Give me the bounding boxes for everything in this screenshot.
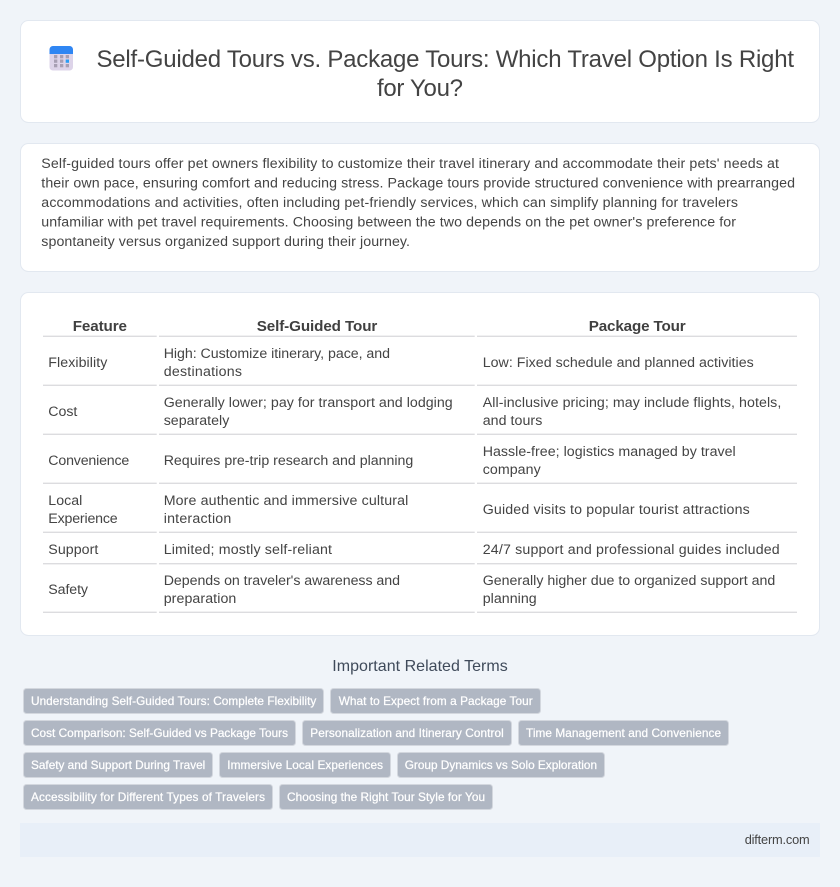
row: support: Support (48, 542, 98, 558)
tag: personalization (302, 720, 512, 746)
row: safety: Generally higher due to organized support and (483, 573, 775, 589)
tag: time management (518, 720, 728, 746)
row: flexibility: destinations (164, 364, 242, 380)
tag: understanding self-guided tours (24, 688, 324, 714)
row: convenience: company (483, 462, 542, 478)
row: cost: All-inclusive pricing; may include flights, hotels, (483, 395, 781, 411)
row: safety: preparation (164, 591, 236, 607)
table header (73, 318, 686, 335)
row: convenience: Requires pre-trip research and planning (164, 453, 413, 469)
tag: cost comparison: Cost Comparison: Self-Guided vs Package Tours (31, 726, 288, 740)
panel: related term tags (24, 688, 728, 810)
tag: accessibility: Accessibility for Different Types of Travelers (31, 790, 265, 804)
text block: introduction paragraph: spontaneity versus organized support during their journey. (41, 234, 410, 250)
row: flexibility: High: Customize itinerary, pace, and (164, 346, 390, 362)
row: local experience: Experience (48, 511, 118, 527)
panel: title card (20, 20, 820, 122)
row: local experience (48, 493, 750, 527)
tag: accessibility (24, 784, 272, 810)
table header: Self-Guided Tour (257, 318, 377, 335)
row: cost: and tours (483, 413, 542, 429)
row: safety: Depends on traveler's awareness and (164, 573, 400, 589)
tag: what to expect (330, 688, 540, 714)
panel: comparison table (20, 292, 820, 636)
row: support: Limited; mostly self-reliant (164, 542, 332, 558)
tag: time management: Time Management and Convenience (526, 726, 721, 740)
tag: personalization: Personalization and Itinerary Control (310, 726, 504, 740)
row: flexibility: Low: Fixed schedule and planned activities (483, 355, 754, 371)
row: cost: Cost (48, 404, 77, 420)
title: for You? (377, 75, 463, 102)
tag: group dynamics (398, 752, 604, 778)
row: convenience: Hassle-free; logistics managed by travel (483, 444, 736, 460)
row: local experience: Guided visits to popular tourist attractions (483, 502, 750, 518)
table rules (43, 336, 797, 613)
footer (20, 823, 820, 857)
text block: introduction paragraph: unfamiliar with pet travel requirements. Choosing between the two depends on the pet owner's preference for (41, 214, 736, 230)
row: flexibility (48, 346, 754, 380)
table header: Package Tour (589, 318, 686, 335)
icon: calendar (50, 46, 73, 70)
row: safety (48, 573, 775, 607)
footer: difterm.com (745, 832, 810, 847)
tag: safety and support: Safety and Support During Travel (31, 758, 205, 772)
row: support (48, 542, 780, 558)
title (96, 46, 794, 102)
tag: cost comparison (24, 720, 296, 746)
text block: introduction paragraph: their own pace, ensuring comfort and reducing stress. Package tours provide structured convenience with prearranged (41, 176, 795, 192)
row: cost: separately (164, 413, 230, 429)
row: convenience: Convenience (48, 453, 129, 469)
row: convenience (48, 444, 736, 478)
row: local experience: More authentic and immersive cultural (164, 493, 408, 509)
row: cost (48, 395, 781, 429)
tag: safety and support (24, 752, 212, 778)
panel: introduction text (20, 144, 820, 272)
row: flexibility: Flexibility (48, 355, 108, 371)
text block: introduction paragraph: accommodations and activities, often including pet-friendly services, which can simplify planning for travelers (41, 195, 738, 211)
row: support: 24/7 support and professional guides included (483, 542, 780, 558)
title: Self-Guided Tours vs. Package Tours: Which Travel Option Is Right (96, 46, 794, 73)
tag: immersive local experiences (220, 752, 390, 778)
table header: Feature (73, 318, 127, 335)
row: local experience: Local (48, 493, 82, 509)
row: local experience: interaction (164, 511, 231, 527)
heading: important related terms: Important Related Terms (332, 658, 508, 675)
tag: immersive local experiences: Immersive Local Experiences (227, 758, 383, 772)
tag: group dynamics: Group Dynamics vs Solo Exploration (405, 758, 597, 772)
text block: introduction paragraph (41, 156, 795, 250)
row: safety: planning (483, 591, 537, 607)
tag: what to expect: What to Expect from a Package Tour (339, 694, 533, 708)
tag: choosing the right tour style (280, 784, 492, 810)
row: safety: Safety (48, 582, 89, 598)
row: cost: Generally lower; pay for transport and lodging (164, 395, 453, 411)
tag: understanding self-guided tours: Understanding Self-Guided Tours: Complete Flexibility (31, 694, 316, 708)
tag: choosing the right tour style: Choosing the Right Tour Style for You (287, 790, 485, 804)
text block: introduction paragraph: Self-guided tours offer pet owners flexibility to customize their travel itinerary and accommodate their pets' needs at (41, 156, 779, 172)
